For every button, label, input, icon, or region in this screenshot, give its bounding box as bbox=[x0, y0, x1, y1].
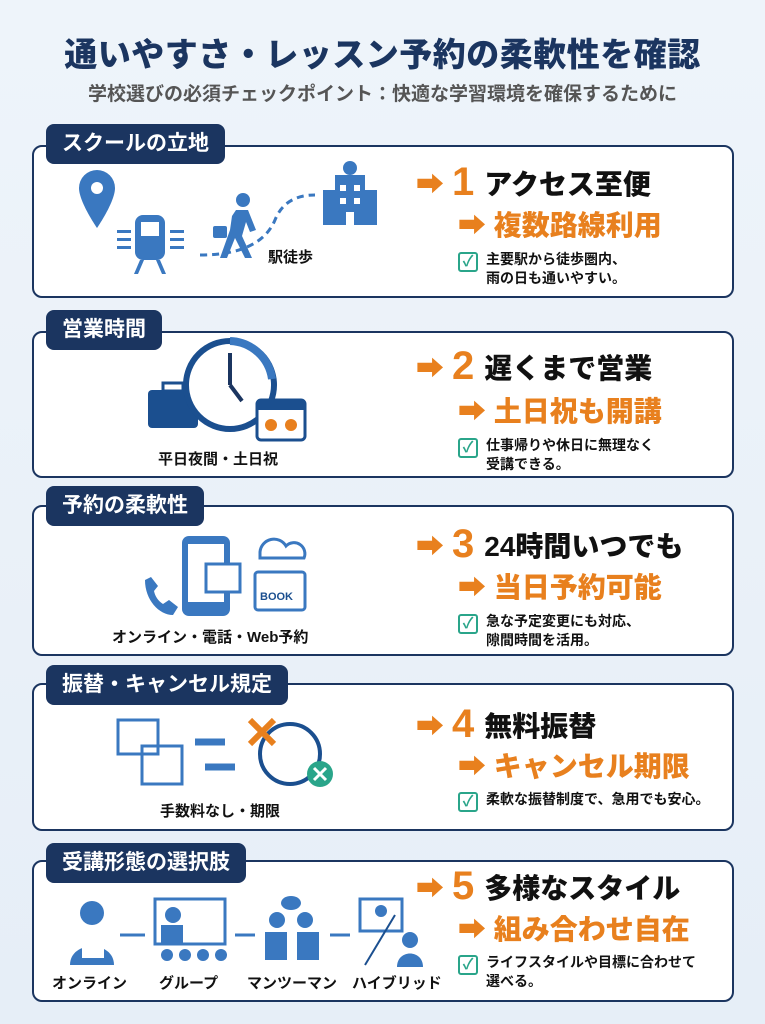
captions: styles bbox=[52, 975, 442, 992]
caption: location: 駅徒歩 bbox=[268, 249, 313, 266]
check 1: 雨の日も通いやすい。 bbox=[486, 270, 626, 286]
icon: booking bbox=[145, 536, 306, 616]
check 3 bbox=[458, 613, 640, 648]
caption: hours: 平日夜間・土日祝 bbox=[158, 451, 278, 468]
subtitle: 学校選びの必須チェックポイント：快適な学習環境を確保するために bbox=[88, 84, 677, 105]
sub heading 4: ➡ キャンセル期限 bbox=[458, 751, 690, 782]
heading 5: 多様なスタイル bbox=[484, 872, 680, 904]
heading 3: 3 bbox=[452, 522, 474, 566]
sub heading 2: ➡ 土日祝も開講 bbox=[458, 396, 662, 427]
check 2: 仕事帰りや休日に無理なく bbox=[486, 437, 654, 453]
heading 3: 24時間いつでも bbox=[484, 530, 683, 562]
sub heading 5: ➡ 組み合わせ自在 bbox=[458, 914, 690, 945]
check 5: ✓ bbox=[463, 956, 473, 973]
captions: styles: ハイブリッド bbox=[352, 975, 442, 992]
check 3: 隙間時間を活用。 bbox=[486, 632, 598, 648]
heading 3: ➡ bbox=[416, 530, 444, 562]
panel: cancel bbox=[32, 683, 734, 831]
icon: booking: BOOK bbox=[260, 591, 293, 603]
tag: location bbox=[46, 124, 225, 164]
check 4: 柔軟な振替制度で、急用でも安心。 bbox=[486, 791, 709, 807]
tag: booking bbox=[46, 486, 204, 526]
tag: location: スクールの立地 bbox=[62, 132, 209, 155]
check 1: ✓ bbox=[463, 253, 473, 270]
heading 1: ➡ bbox=[416, 168, 444, 200]
tag: booking: 予約の柔軟性 bbox=[62, 494, 188, 517]
check 4: ✓ bbox=[463, 793, 473, 810]
panel: styles bbox=[32, 860, 734, 1002]
check 1: 主要駅から徒歩圏内、 bbox=[486, 251, 626, 267]
icon: clock bbox=[148, 337, 306, 442]
check 2 bbox=[458, 437, 654, 472]
heading 2: ➡ bbox=[416, 352, 444, 384]
heading 3 bbox=[416, 522, 683, 566]
tag: hours bbox=[46, 310, 162, 350]
sub heading 1: ➡ 複数路線利用 bbox=[458, 210, 662, 241]
check 5 bbox=[458, 954, 696, 989]
captions: styles: グループ bbox=[159, 975, 218, 992]
icons: location bbox=[79, 161, 377, 274]
panel: location bbox=[32, 145, 734, 298]
caption: cancel: 手数料なし・期限 bbox=[160, 803, 280, 820]
heading 4: 無料振替 bbox=[484, 710, 596, 742]
captions: styles: オンライン bbox=[52, 975, 127, 992]
check 4 bbox=[458, 791, 709, 812]
tag: styles: 受講形態の選択肢 bbox=[62, 851, 230, 874]
check 5: 選べる。 bbox=[486, 973, 542, 989]
heading 4 bbox=[416, 702, 596, 746]
heading 5: 5 bbox=[452, 864, 474, 908]
caption: booking: オンライン・電話・Web予約 bbox=[112, 629, 308, 646]
heading 5: ➡ bbox=[416, 872, 444, 904]
heading 2: 2 bbox=[452, 344, 474, 388]
check 3: ✓ bbox=[463, 615, 473, 632]
tag: cancel: 振替・キャンセル規定 bbox=[62, 673, 272, 696]
panel: hours bbox=[32, 331, 734, 478]
heading 1: アクセス至便 bbox=[484, 168, 651, 200]
heading 2: 遅くまで営業 bbox=[484, 352, 652, 384]
heading 4: 4 bbox=[452, 702, 474, 746]
tag: styles bbox=[46, 843, 246, 883]
title: 通いやすさ・レッスン予約の柔軟性を確認 bbox=[64, 36, 701, 73]
heading 1 bbox=[416, 160, 651, 204]
tag: hours: 営業時間 bbox=[62, 318, 146, 341]
check 1 bbox=[458, 251, 626, 286]
icon: cancel bbox=[116, 718, 333, 787]
check 5: ライフスタイルや目標に合わせて bbox=[486, 954, 696, 970]
heading 5 bbox=[416, 864, 680, 908]
sub heading 3: ➡ 当日予約可能 bbox=[458, 572, 662, 603]
heading 1: 1 bbox=[452, 160, 474, 204]
check 2: 受講できる。 bbox=[486, 456, 570, 472]
icons: styles bbox=[70, 896, 423, 967]
heading 4: ➡ bbox=[416, 710, 444, 742]
heading 2 bbox=[416, 344, 652, 388]
check 2: ✓ bbox=[463, 439, 473, 456]
check 3: 急な予定変更にも対応、 bbox=[486, 613, 640, 629]
captions: styles: マンツーマン bbox=[247, 975, 337, 992]
panel: booking bbox=[32, 505, 734, 656]
tag: cancel bbox=[46, 665, 288, 705]
